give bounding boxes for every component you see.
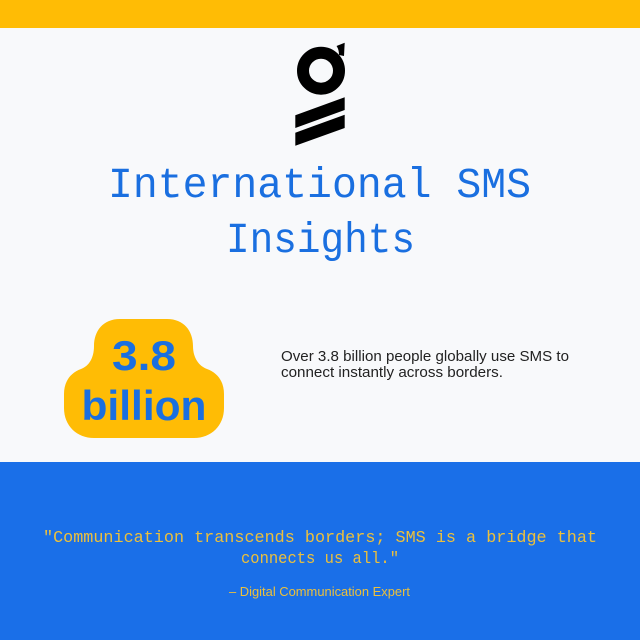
stat badge: 3.8 billion: billion xyxy=(82,382,206,429)
quote attribution: – Digital Communication Expert xyxy=(229,585,411,599)
title xyxy=(108,161,531,265)
quote: connects us all." xyxy=(241,549,399,568)
quote: "Communication transcends borders; SMS is a bridge that xyxy=(43,528,597,547)
icon: brand logo xyxy=(295,43,345,146)
quote xyxy=(43,528,597,568)
stat badge: 3.8 billion: 3.8 xyxy=(112,332,176,379)
bottom blue panel xyxy=(0,462,640,640)
stat description xyxy=(281,349,569,381)
stat description: Over 3.8 billion people globally use SMS to xyxy=(281,349,569,365)
title: Insights xyxy=(226,216,415,265)
stat description: connect instantly across borders. xyxy=(281,365,503,381)
title: International SMS xyxy=(108,161,531,210)
stat badge: 3.8 billion xyxy=(64,319,224,438)
top yellow band xyxy=(0,0,640,28)
